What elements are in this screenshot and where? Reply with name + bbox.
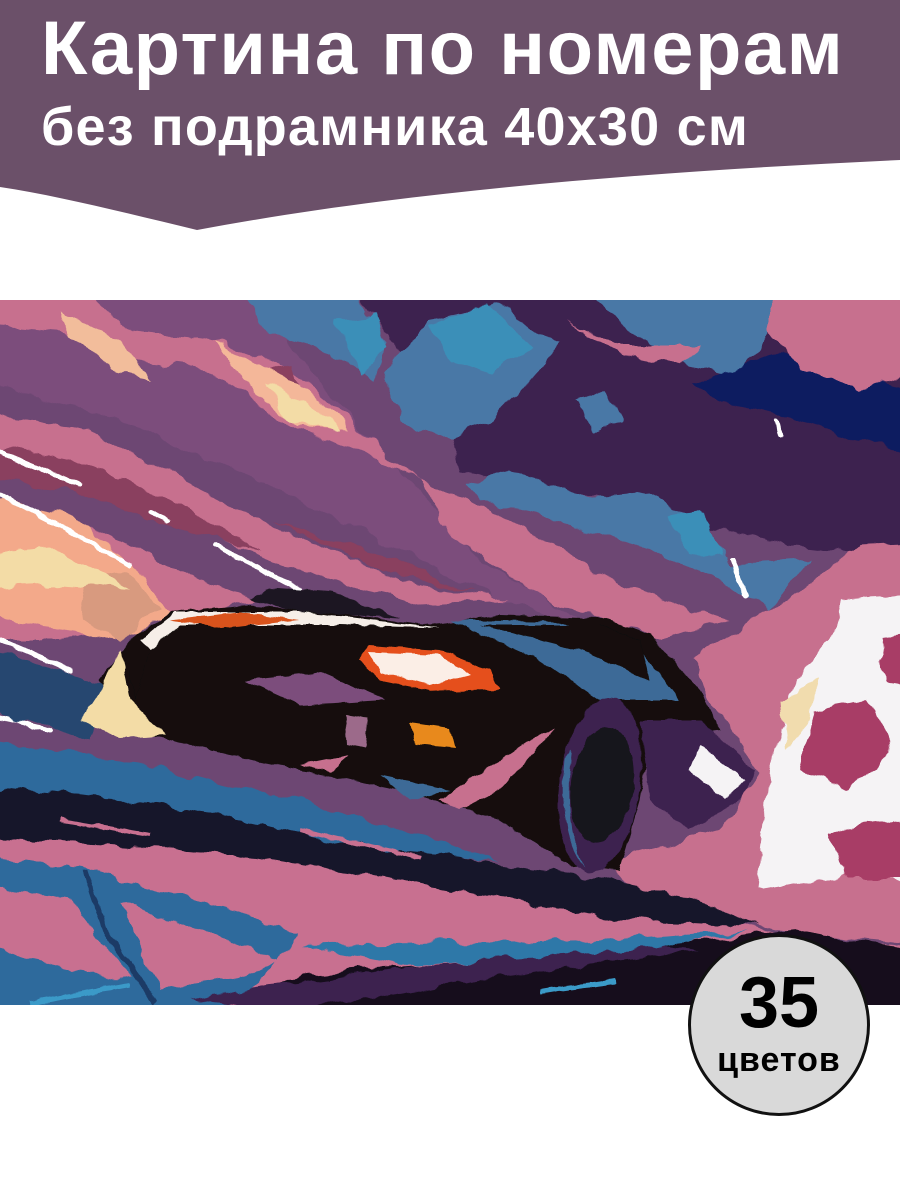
badge: 35 colours <box>688 934 870 1116</box>
title: Картина по номерам <box>41 6 844 91</box>
subtitle: без подрамника 40х30 см <box>41 97 749 157</box>
header banner <box>0 0 900 230</box>
car <box>80 588 755 878</box>
smoke <box>610 540 900 950</box>
blue clouds <box>225 270 900 610</box>
wheel <box>548 692 652 878</box>
sky and clouds <box>0 240 900 1070</box>
sunset glow <box>0 310 350 640</box>
painting: car drifting at sunset <box>0 300 900 1005</box>
unit label: цветов <box>717 1041 841 1079</box>
road markings <box>30 820 615 1003</box>
road <box>0 640 900 1060</box>
pink clouds <box>0 270 900 640</box>
number: 35 <box>739 963 819 1043</box>
white light streaks <box>0 422 780 768</box>
